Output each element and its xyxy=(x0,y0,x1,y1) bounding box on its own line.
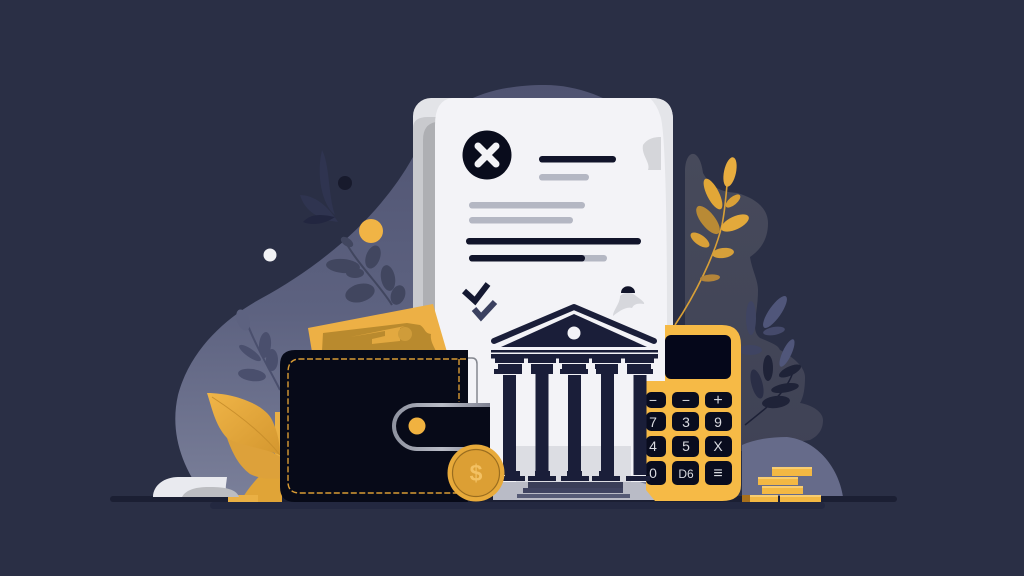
calculator key labels: ≡ xyxy=(713,465,723,482)
calculator key labels: 5 xyxy=(682,438,690,454)
calculator key labels: X xyxy=(713,438,723,454)
calculator key labels: 4 xyxy=(649,438,657,454)
entablature xyxy=(491,350,658,352)
wallet xyxy=(280,350,490,502)
columns xyxy=(503,375,516,475)
text lines xyxy=(466,156,641,262)
check marks xyxy=(464,284,495,317)
document front sheet xyxy=(435,98,673,482)
calculator key labels: 0 xyxy=(649,465,657,481)
steps xyxy=(528,482,623,488)
calculator key labels xyxy=(649,392,723,482)
bank building xyxy=(491,307,658,498)
error icon xyxy=(462,130,512,180)
right plant xyxy=(738,293,803,425)
bank platform xyxy=(493,482,662,500)
document back sheet xyxy=(413,98,533,398)
lower right blob xyxy=(742,437,843,497)
white paper pile xyxy=(153,477,239,497)
right background blob xyxy=(685,154,823,460)
gold sprig xyxy=(675,156,751,325)
small stain xyxy=(613,293,644,316)
dark plant upper left xyxy=(300,150,352,224)
calculator key labels: D6 xyxy=(678,467,694,481)
column bases xyxy=(505,471,520,477)
ground line xyxy=(110,496,897,509)
calculator key labels: 9 xyxy=(714,414,722,430)
calculator key labels: 3 xyxy=(682,414,690,430)
calculator xyxy=(646,325,741,501)
white dot xyxy=(264,248,276,262)
coin stack xyxy=(742,467,821,502)
capitals xyxy=(495,358,524,363)
calculator key labels: − xyxy=(682,392,690,408)
calculator key labels: − xyxy=(649,392,657,408)
paper shade behind bank xyxy=(516,446,631,482)
calculator key labels: 7 xyxy=(649,414,657,430)
plant lower on left blob xyxy=(234,308,280,390)
calculator key labels: + xyxy=(713,392,723,409)
smudge xyxy=(643,137,661,170)
plant on left blob xyxy=(325,235,408,307)
wallet strap xyxy=(394,405,490,449)
gold dot xyxy=(359,219,383,243)
pediment xyxy=(494,307,654,341)
dollar coin xyxy=(448,444,504,502)
calculator keys xyxy=(646,392,732,485)
left background blob xyxy=(175,85,660,497)
gold leaves left xyxy=(207,393,283,502)
cash note xyxy=(308,304,447,352)
dollar coin: $ xyxy=(470,460,483,486)
